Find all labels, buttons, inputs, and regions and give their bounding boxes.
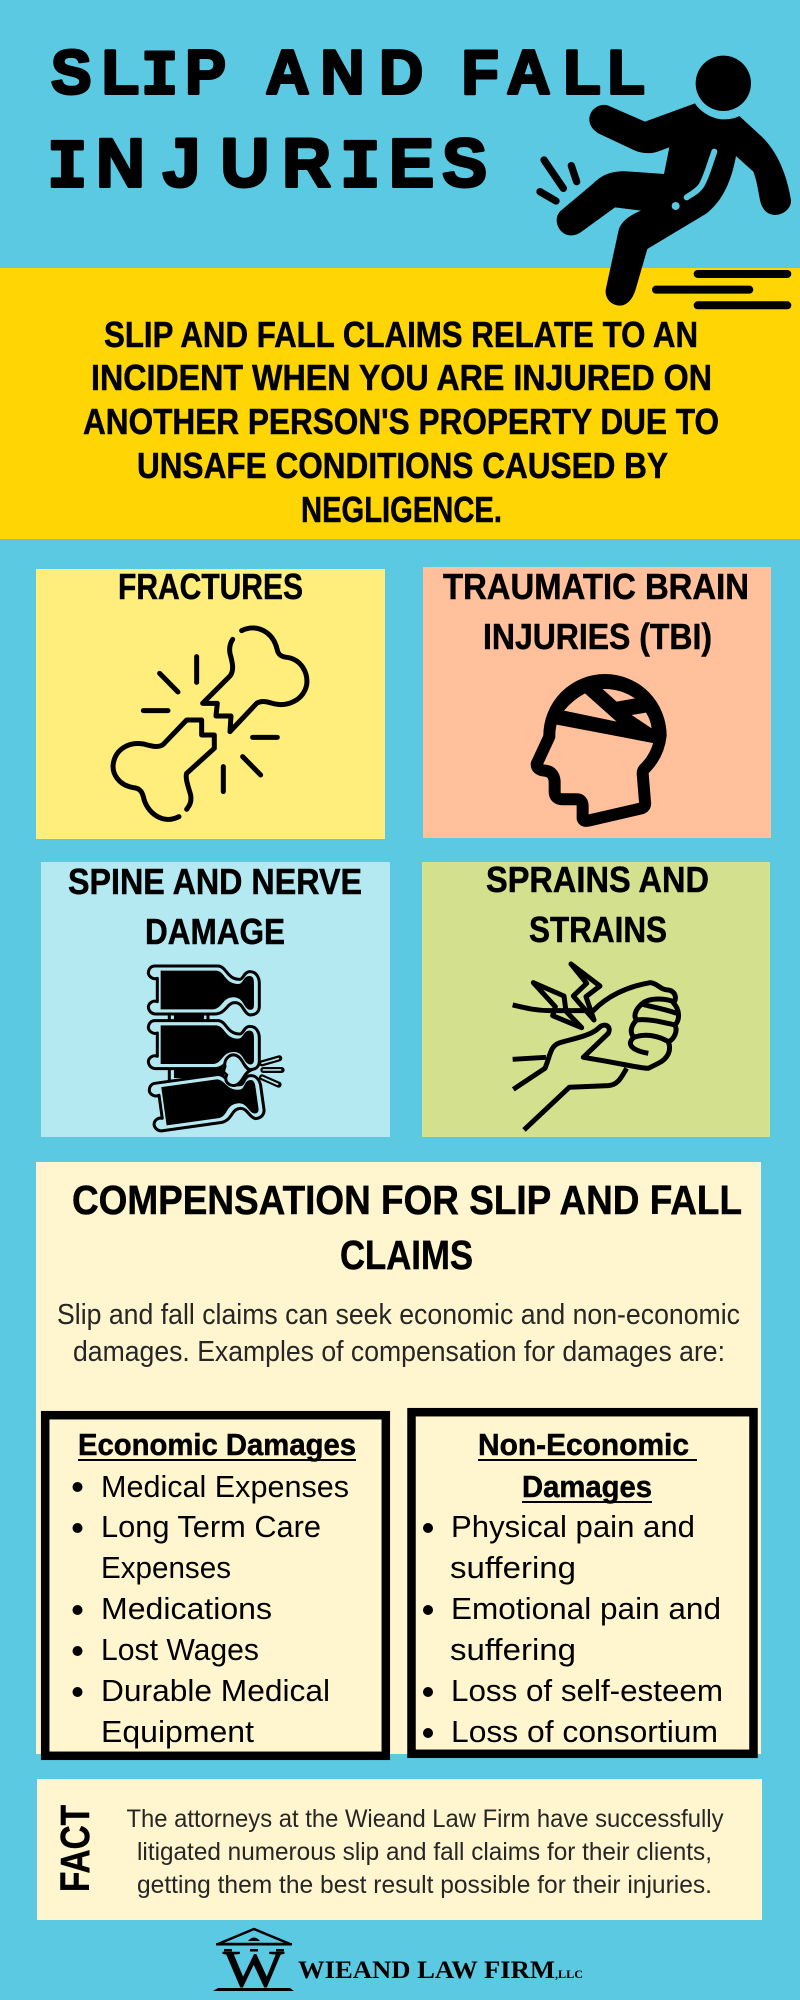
- list: economic damages items: Equipment: [101, 1714, 254, 1749]
- intro text: ANOTHER PERSON'S PROPERTY DUE TO: [83, 401, 719, 442]
- heading: non-economic damages: Non-Economic: [478, 1427, 689, 1462]
- icon: falling person: [540, 56, 791, 306]
- compensation intro text: damages. Examples of compensation for damages are:: [73, 1336, 725, 1368]
- heading: traumatic brain injuries: [443, 566, 749, 657]
- title: U: [221, 125, 269, 202]
- icon: courthouse: [213, 1929, 294, 1998]
- title: L: [102, 38, 139, 108]
- title: N: [320, 38, 364, 108]
- heading: traumatic brain injuries: INJURIES (TBI): [483, 616, 712, 657]
- panel: spine and nerve damage: [41, 861, 390, 1137]
- heading: sprains and strains: [486, 859, 709, 950]
- fact text: [126, 1805, 724, 1899]
- list: economic damages items: Lost Wages: [101, 1632, 259, 1667]
- list: economic damages items: Durable Medical: [101, 1673, 330, 1708]
- compensation intro text: Slip and fall claims can seek economic and non-economic: [57, 1299, 740, 1331]
- list: economic damages items: Medical Expenses: [101, 1469, 349, 1504]
- title: N: [96, 125, 145, 202]
- heading: traumatic brain injuries: TRAUMATIC BRAIN: [443, 566, 749, 607]
- title: D: [379, 38, 440, 108]
- compensation intro text: [57, 1299, 740, 1368]
- fact text: litigated numerous slip and fall claims for their clients,: [137, 1838, 712, 1866]
- heading: compensation: CLAIMS: [340, 1232, 473, 1278]
- title: I: [340, 129, 381, 208]
- title: A: [507, 38, 551, 108]
- title: S: [442, 125, 487, 202]
- label: fact: FACT: [52, 1805, 98, 1892]
- fact text: getting them the best result possible for their injuries.: [137, 1871, 712, 1899]
- icon: sprained wrist: [513, 964, 679, 1130]
- logo wordmark: ,LLC: [555, 1967, 583, 1981]
- heading: sprains and strains: STRAINS: [529, 909, 667, 950]
- list: economic damages items: Long Term Care: [101, 1509, 321, 1544]
- heading: spine and nerve damage: SPINE AND NERVE: [68, 861, 362, 902]
- title: R: [282, 125, 331, 202]
- heading: sprains and strains: SPRAINS AND: [486, 859, 709, 900]
- list: non-economic damages items: Loss of self-esteem: [451, 1673, 723, 1708]
- heading: compensation: COMPENSATION FOR SLIP AND FALL: [72, 1177, 742, 1223]
- title: P: [185, 38, 242, 108]
- panel: traumatic brain injuries: [423, 566, 771, 838]
- banner: yellow intro band: [0, 268, 800, 539]
- title: A: [266, 38, 309, 108]
- list: non-economic damages items: [423, 1509, 723, 1749]
- title: S: [51, 38, 91, 108]
- list: economic damages items: [72, 1469, 349, 1749]
- panel: fractures: [36, 566, 385, 839]
- title: L: [564, 38, 601, 108]
- panel: fact: [37, 1779, 762, 1920]
- intro text: UNSAFE CONDITIONS CAUSED BY: [137, 445, 668, 486]
- list: non-economic damages items: suffering: [450, 1550, 576, 1585]
- title: E: [389, 125, 434, 202]
- heading: spine and nerve damage: DAMAGE: [145, 911, 285, 952]
- heading: compensation: [72, 1177, 742, 1278]
- heading: economic damages: Economic Damages: [78, 1427, 356, 1462]
- icon: broken bone: [113, 628, 307, 819]
- logo wordmark: WIEAND LAW FIRM: [298, 1957, 555, 1984]
- list: non-economic damages items: Physical pain and: [451, 1509, 695, 1544]
- icon: courthouse: W: [223, 1941, 284, 1998]
- logo: Wieand Law Firm: [213, 1929, 583, 1998]
- intro text: [83, 314, 719, 530]
- panel: sprains and strains: [422, 859, 770, 1137]
- title: [47, 38, 645, 208]
- heading: spine and nerve damage: [68, 861, 362, 952]
- icon: bandaged head: [537, 677, 667, 821]
- list: economic damages items: Medications: [101, 1591, 272, 1626]
- heading: non-economic damages: Damages: [522, 1469, 652, 1504]
- icon: damaged spine: [148, 966, 282, 1133]
- list: economic damages items: Expenses: [101, 1550, 231, 1585]
- title: L: [608, 38, 645, 108]
- box: economic damages: [45, 1415, 386, 1756]
- heading: fractures: FRACTURES: [118, 566, 303, 607]
- intro text: SLIP AND FALL CLAIMS RELATE TO AN: [104, 314, 698, 355]
- title: I: [47, 129, 88, 208]
- fact text: The attorneys at the Wieand Law Firm have successfully: [126, 1805, 724, 1833]
- list: non-economic damages items: Loss of consortium: [451, 1714, 718, 1749]
- title: F: [462, 38, 499, 108]
- list: non-economic damages items: Emotional pain and: [451, 1591, 721, 1626]
- intro text: NEGLIGENCE.: [301, 489, 502, 530]
- title: I: [141, 41, 178, 113]
- title: J: [163, 125, 200, 202]
- list: non-economic damages items: suffering: [450, 1632, 576, 1667]
- intro text: INCIDENT WHEN YOU ARE INJURED ON: [91, 357, 712, 398]
- heading: non-economic damages: [478, 1427, 697, 1504]
- box: non-economic damages: [412, 1412, 754, 1754]
- panel: compensation: [36, 1162, 761, 1756]
